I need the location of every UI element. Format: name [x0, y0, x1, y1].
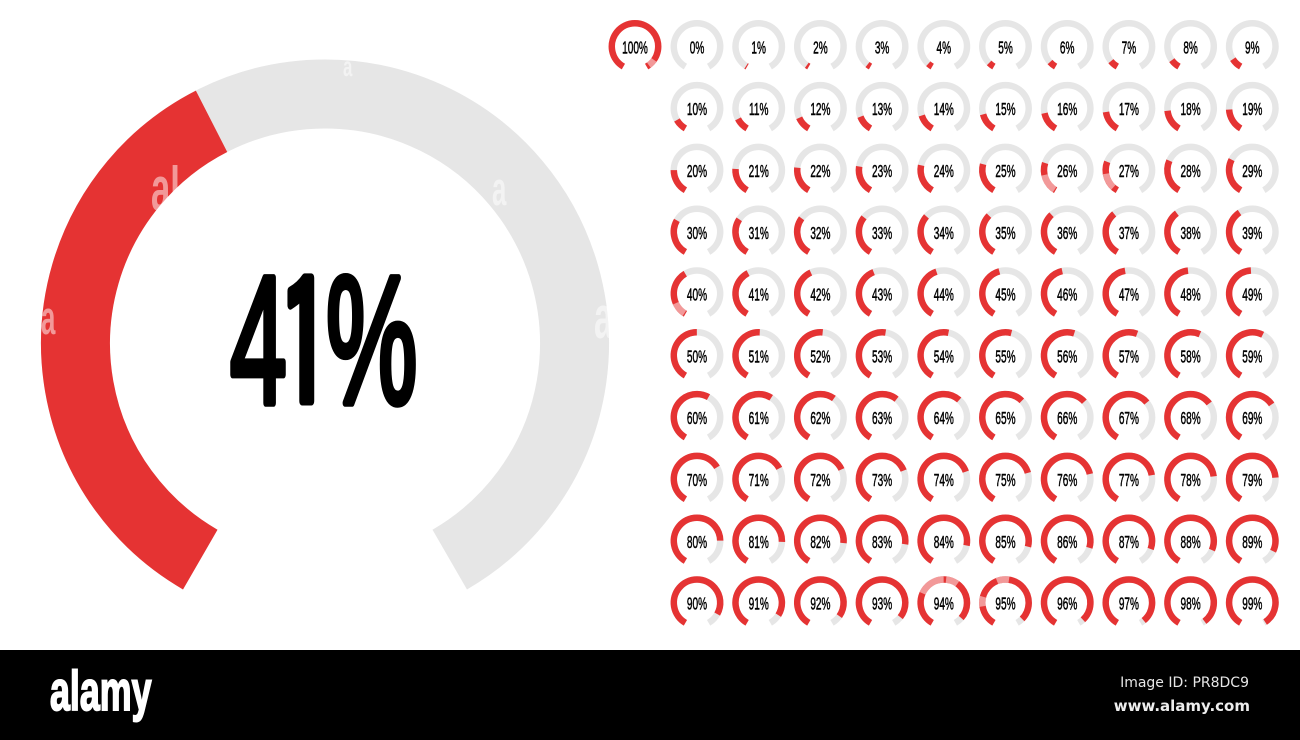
gauge row 10-19%	[674, 85, 1276, 128]
gauge row 30-39%: 31%	[749, 224, 769, 244]
watermark letters on large gauge	[41, 51, 613, 352]
gauge row 50-59%: 50%	[687, 348, 707, 367]
gauge row 80-89%: 80%	[687, 533, 707, 553]
gauge row 40-49%: 41%	[749, 286, 769, 306]
gauge row 50-59%: 52%	[810, 348, 831, 367]
gauge row 50-59%: 54%	[934, 348, 954, 367]
gauge row 80-89%: 84%	[934, 533, 954, 553]
gauge row 10-19%: 18%	[1181, 100, 1201, 120]
gauge row 0-9%	[674, 23, 1276, 67]
gauge row 30-39%: 36%	[1057, 224, 1077, 244]
gauge row 20-29%: 29%	[1242, 162, 1262, 182]
gauge row 0-9%: 1%	[751, 39, 766, 58]
gauge row 50-59%: 58%	[1181, 348, 1201, 367]
gauge row 0-9%: 5%	[998, 39, 1013, 58]
gauge row 20-29%: 28%	[1181, 162, 1201, 182]
gauge row 60-69%: 66%	[1057, 409, 1077, 429]
gauge row 90-99%: 97%	[1119, 595, 1139, 615]
gauge row 70-79%: 73%	[872, 471, 892, 491]
gauge row 50-59%	[674, 332, 1276, 376]
gauge row 0-9%: 8%	[1183, 39, 1198, 58]
gauge row 10-19%: 17%	[1119, 100, 1139, 120]
gauge row 70-79%: 79%	[1242, 471, 1262, 491]
gauge row 40-49%: 42%	[810, 286, 831, 306]
large value label	[230, 239, 417, 442]
website: www.alamy.com	[1114, 697, 1250, 715]
gauge row 90-99%: 91%	[749, 595, 769, 615]
gauge row 0-9%: 0%	[690, 39, 704, 58]
gauge row 30-39%: 32%	[810, 224, 831, 244]
gauge row 90-99%	[674, 579, 1276, 623]
gauge row 30-39%: 33%	[872, 224, 892, 244]
gauge row 20-29%: 24%	[934, 162, 954, 182]
gauge row 30-39%: 30%	[687, 224, 707, 244]
gauge row 50-59%: 59%	[1242, 348, 1262, 367]
gauge row 90-99%: 99%	[1242, 595, 1262, 615]
gauge row 10-19%: 10%	[687, 100, 707, 120]
gauge row 0-9%: 6%	[1060, 39, 1075, 58]
gauge row 20-29%: 20%	[687, 162, 707, 182]
gauge row 10-19%: 13%	[872, 100, 892, 120]
gauge row 60-69%: 65%	[995, 409, 1016, 429]
gauge 100%	[612, 23, 658, 67]
gauge row 40-49%	[674, 270, 1276, 314]
gauge row 80-89%	[674, 518, 1276, 561]
gauge row 70-79%: 75%	[995, 471, 1016, 491]
large gauge 41%	[41, 51, 613, 560]
gauge row 30-39%: 38%	[1181, 224, 1201, 244]
gauge row 20-29%: 25%	[995, 162, 1016, 182]
watermark letters on large gauge: a	[41, 293, 56, 345]
gauge row 90-99%: 95%	[995, 595, 1016, 615]
gauge row 60-69%: 69%	[1242, 409, 1262, 429]
gauge row 80-89%: 89%	[1242, 533, 1262, 553]
gauge row 0-9%: 4%	[937, 39, 951, 58]
alamy logo: alamy	[50, 659, 152, 722]
watermark letters on large gauge: a	[594, 285, 613, 352]
gauge row 20-29%	[674, 147, 1276, 190]
gauge row 60-69%: 60%	[687, 409, 707, 429]
gauge row 70-79%: 70%	[687, 471, 707, 491]
gauge row 30-39%: 39%	[1242, 224, 1262, 244]
gauge row 50-59%: 55%	[995, 348, 1016, 367]
gauge row 10-19%: 15%	[995, 100, 1016, 120]
gauge row 80-89%: 85%	[995, 533, 1016, 553]
gauge row 40-49%: 43%	[872, 286, 892, 306]
large value label: %	[326, 239, 417, 442]
gauge row 40-49%: 45%	[995, 286, 1016, 306]
gauge row 10-19%: 19%	[1242, 100, 1262, 120]
gauge row 20-29%: 23%	[872, 162, 892, 182]
gauge row 70-79%: 72%	[810, 471, 831, 491]
gauge row 40-49%: 47%	[1119, 286, 1139, 306]
watermark letters on large gauge: al	[151, 154, 180, 224]
gauge row 30-39%: 35%	[995, 224, 1016, 244]
image id: Image ID: PR8DC9	[1120, 675, 1249, 691]
gauge row 90-99%: 94%	[934, 595, 954, 615]
gauge row 20-29%: 21%	[749, 162, 769, 182]
gauge row 20-29%: 27%	[1119, 162, 1139, 182]
gauge row 40-49%: 46%	[1057, 286, 1077, 306]
footer bar	[0, 650, 1300, 740]
gauge row 80-89%: 82%	[810, 533, 831, 553]
gauge row 60-69%: 62%	[810, 409, 831, 429]
gauge 100%: 100%	[622, 39, 648, 58]
gauge row 70-79%: 78%	[1181, 471, 1201, 491]
small gauge grid	[612, 23, 1276, 623]
gauge row 80-89%: 83%	[872, 533, 892, 553]
large value label: 4	[230, 239, 287, 442]
gauge row 60-69%: 68%	[1181, 409, 1201, 429]
gauge row 90-99%: 92%	[810, 595, 831, 615]
watermark letters on large gauge: a	[343, 51, 352, 82]
gauge row 70-79%: 76%	[1057, 471, 1077, 491]
gauge row 10-19%: 14%	[934, 100, 954, 120]
gauge row 30-39%: 34%	[934, 224, 954, 244]
gauge row 50-59%: 57%	[1119, 348, 1139, 367]
gauge row 60-69%: 63%	[872, 409, 892, 429]
gauge row 70-79%	[674, 456, 1276, 499]
gauge row 0-9%: 9%	[1245, 39, 1260, 58]
gauge row 80-89%: 81%	[749, 533, 769, 553]
gauge row 70-79%: 77%	[1119, 471, 1139, 491]
gauge row 50-59%: 53%	[872, 348, 892, 367]
gauge row 20-29%: 26%	[1057, 162, 1077, 182]
gauge row 40-49%: 44%	[934, 286, 954, 306]
gauge row 10-19%: 16%	[1057, 100, 1077, 120]
gauge row 70-79%: 71%	[749, 471, 769, 491]
gauge row 60-69%: 64%	[934, 409, 954, 429]
gauge row 90-99%: 93%	[872, 595, 892, 615]
large value label: 1	[277, 255, 333, 431]
gauge row 60-69%: 61%	[749, 409, 769, 429]
gauge row 60-69%	[674, 394, 1276, 437]
gauge row 40-49%: 40%	[687, 286, 707, 306]
gauge row 50-59%: 56%	[1057, 348, 1077, 367]
gauge row 30-39%: 37%	[1119, 224, 1139, 244]
gauge row 80-89%: 88%	[1181, 533, 1201, 553]
watermark letters on large gauge: a	[492, 164, 507, 216]
gauge row 10-19%: 11%	[749, 100, 768, 120]
gauge row 40-49%: 48%	[1181, 286, 1201, 306]
gauge row 90-99%: 98%	[1181, 595, 1201, 615]
gauge row 80-89%: 86%	[1057, 533, 1077, 553]
gauge row 20-29%: 22%	[810, 162, 831, 182]
large gauge track	[76, 94, 574, 560]
gauge row 70-79%: 74%	[934, 471, 954, 491]
large gauge red arc	[76, 94, 574, 560]
gauge row 0-9%: 7%	[1122, 39, 1136, 58]
gauge row 10-19%: 12%	[810, 100, 831, 120]
gauge row 60-69%: 67%	[1119, 409, 1139, 429]
gauge row 90-99%: 96%	[1057, 595, 1077, 615]
gauge row 30-39%	[674, 209, 1276, 252]
gauge row 40-49%: 49%	[1242, 286, 1262, 306]
gauge row 80-89%: 87%	[1119, 533, 1139, 553]
gauge row 0-9%: 2%	[813, 39, 828, 58]
gauge row 50-59%: 51%	[749, 348, 769, 367]
gauge row 0-9%: 3%	[875, 39, 889, 58]
gauge row 90-99%: 90%	[687, 595, 707, 615]
